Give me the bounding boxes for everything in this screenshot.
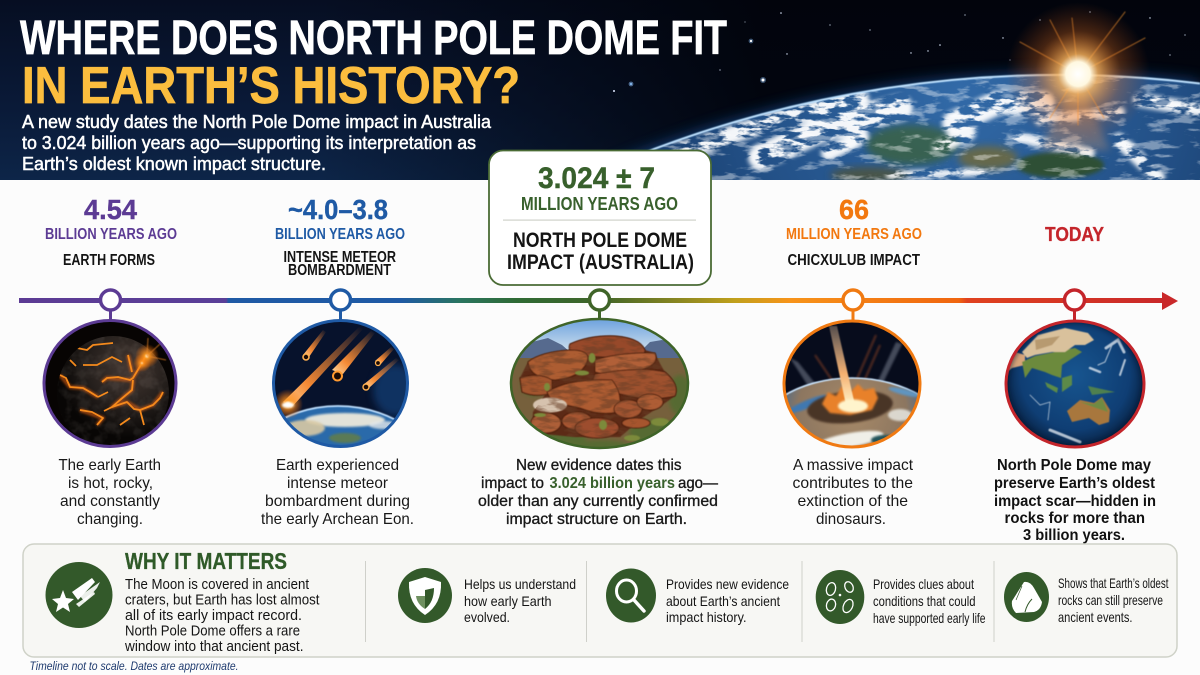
icon: shield — [398, 568, 452, 623]
benefit: impact history: Provides new evidence — [666, 576, 789, 592]
footnote: Timeline not to scale. Dates are approximate. — [30, 659, 238, 673]
image: North Pole Dome rock outcrop — [505, 318, 695, 450]
subtitle: Earth’s oldest known impact structure. — [22, 154, 326, 174]
description: Chicxulub: dinosaurs. — [816, 511, 886, 528]
description: North Pole Dome: impact structure on Earth. — [506, 511, 687, 528]
description: North Pole Dome — [478, 457, 718, 528]
description: today: rocks for more than — [1004, 510, 1145, 527]
image: Chicxulub impact — [782, 320, 922, 448]
description: today — [994, 457, 1156, 544]
event 2 heading: bombardment: BOMBARDMENT — [288, 262, 391, 279]
panel: why it matters — [23, 544, 1177, 657]
description: Earth forms: and constantly — [60, 493, 160, 510]
why it matters text: window into that ancient past. — [124, 638, 304, 655]
heading: why it matters: WHY IT MATTERS — [125, 548, 287, 574]
description: Earth forms — [58, 457, 161, 528]
icon: rock — [1004, 572, 1049, 622]
description: Earth forms: is hot, rocky, — [68, 475, 153, 492]
description: bombardment — [261, 457, 414, 528]
image: Earth today — [1006, 321, 1144, 447]
benefit: oldest rocks: ancient events. — [1058, 609, 1132, 625]
benefit: impact history: impact history. — [666, 609, 746, 625]
benefit: early life — [873, 576, 986, 626]
featured callout: North Pole Dome impact — [489, 150, 711, 285]
subtitle: to 3.024 billion years ago—supporting its interpretation as — [22, 133, 476, 153]
featured callout: North Pole Dome impact: 3.024 ± 7 — [538, 162, 655, 195]
description: Chicxulub — [792, 457, 914, 528]
description: Chicxulub: A massive impact — [793, 457, 914, 474]
description: North Pole Dome: older than any currently confirmed — [478, 493, 718, 510]
event 2 heading: bombardment: BILLION YEARS AGO — [275, 226, 405, 243]
timeline node: bombardment — [330, 290, 350, 321]
description: Chicxulub: extinction of the — [798, 493, 908, 510]
sun flare — [1010, 6, 1146, 140]
benefit: early Earth: how early Earth — [464, 593, 552, 609]
title: WHERE DOES NORTH POLE DOME FIT — [20, 12, 727, 65]
event 1 heading: Earth forms: BILLION YEARS AGO — [45, 226, 177, 243]
featured callout: North Pole Dome impact: IMPACT (AUSTRALIA) — [507, 251, 694, 274]
event 4 heading: Chicxulub: CHICXULUB IMPACT — [788, 252, 920, 269]
benefit: early life: conditions that could — [873, 593, 976, 609]
description: today: 3 billion years. — [1023, 527, 1125, 544]
description: North Pole Dome: impact to — [481, 475, 544, 492]
subtitle — [22, 112, 492, 174]
header banner: space and Earth — [0, 0, 1200, 183]
benefit: early life: have supported early life — [873, 610, 986, 626]
description: Chicxulub: contributes to the — [792, 475, 913, 492]
featured callout: North Pole Dome impact: NORTH POLE DOME — [513, 229, 687, 252]
description: North Pole Dome: ago— — [678, 475, 718, 492]
benefit: early life: Provides clues about — [873, 576, 974, 592]
timeline arrow — [19, 292, 1178, 310]
icon: microbes — [816, 570, 864, 624]
description: bombardment: intense meteor — [287, 475, 389, 492]
event 4 heading: Chicxulub: MILLION YEARS AGO — [786, 226, 922, 243]
description: today: impact scar—hidden in — [994, 493, 1156, 510]
timeline node: North Pole Dome — [590, 290, 610, 319]
description: bombardment: the early Archean Eon. — [261, 511, 414, 528]
description: today: preserve Earth’s oldest — [994, 475, 1156, 492]
description: bombardment: Earth experienced — [276, 457, 399, 474]
image: molten early Earth — [44, 320, 176, 455]
benefit: early Earth: evolved. — [464, 609, 510, 625]
event 4 heading: Chicxulub: 66 — [839, 194, 869, 225]
why it matters text: all of its early impact record. — [125, 607, 302, 624]
panel dividers — [365, 561, 994, 642]
why it matters text: craters, but Earth has lost almost — [125, 592, 320, 608]
why it matters text: The Moon is covered in ancient — [125, 576, 310, 593]
why it matters text — [124, 576, 320, 655]
benefit: impact history — [666, 576, 789, 625]
benefit: impact history: about Earth’s ancient — [666, 593, 780, 609]
event 2 heading: bombardment: INTENSE METEOR — [284, 249, 396, 266]
benefit: oldest rocks: rocks can still preserve — [1058, 592, 1163, 608]
timeline node: Earth forms — [100, 290, 120, 321]
why it matters text: North Pole Dome offers a rare — [125, 622, 300, 640]
description: bombardment: bombardment during — [265, 493, 410, 510]
event 2 heading: bombardment — [275, 194, 405, 279]
event 4 heading: Chicxulub — [786, 194, 922, 269]
image: meteor bombardment — [272, 319, 409, 448]
description: North Pole Dome: New evidence dates this — [516, 457, 682, 474]
description: North Pole Dome: 3.024 billion years — [550, 475, 675, 492]
title: IN EARTH’S HISTORY? — [22, 57, 520, 115]
event 1 heading: Earth forms: EARTH FORMS — [63, 252, 155, 269]
benefit: early Earth: Helps us understand — [464, 576, 576, 592]
event 2 heading: bombardment: ~4.0–3.8 — [288, 194, 388, 225]
benefit: early Earth — [464, 576, 576, 625]
description: today: North Pole Dome may — [997, 457, 1151, 474]
title — [20, 12, 727, 115]
icon: magnifier — [606, 568, 656, 622]
timeline node: Chicxulub — [843, 290, 863, 321]
event 1 heading: Earth forms — [45, 194, 177, 269]
subtitle: A new study dates the North Pole Dome impact in Australia — [22, 112, 492, 132]
event 5 heading: Today: TODAY — [1045, 224, 1105, 246]
description: Earth forms: changing. — [77, 511, 143, 528]
timeline node: today — [1064, 290, 1084, 321]
description: Earth forms: The early Earth — [58, 457, 161, 474]
benefit: oldest rocks — [1058, 575, 1169, 625]
icon: shooting star — [46, 562, 112, 628]
event 1 heading: Earth forms: 4.54 — [84, 194, 137, 225]
featured callout: North Pole Dome impact: MILLION YEARS AGO — [521, 194, 678, 214]
